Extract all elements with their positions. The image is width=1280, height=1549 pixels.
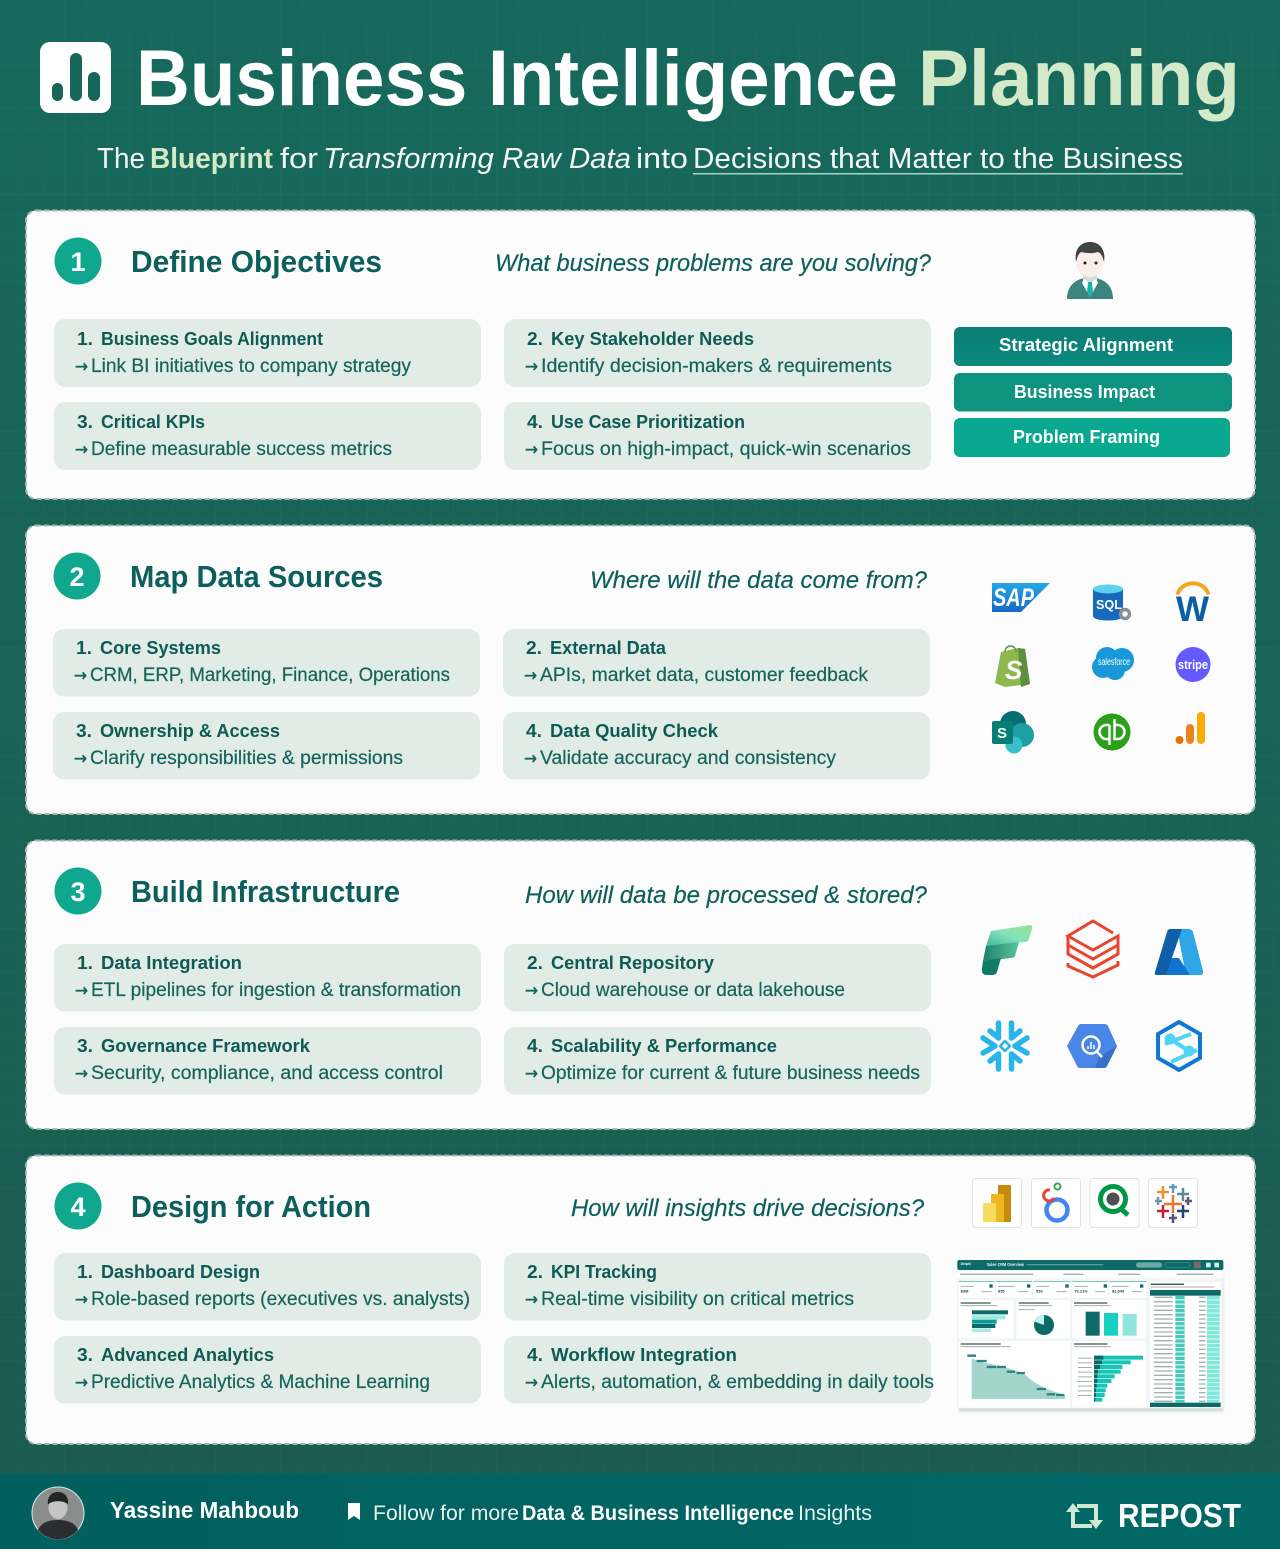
card: kpi tracking: 2. [527, 1261, 543, 1282]
footer bar [0, 1474, 1280, 1549]
card: data quality check: Validate accuracy and consistency [540, 748, 837, 769]
card: external data: External Data [550, 637, 667, 658]
card: data quality check [503, 712, 930, 780]
card: critical kpis: Define measurable success metrics [91, 439, 392, 460]
title: Planning [918, 33, 1240, 122]
icon: Looker tile [1032, 1178, 1080, 1228]
panel: define objectives [26, 210, 1255, 499]
card: critical kpis: → [75, 440, 88, 460]
step badge 3: 3 [70, 877, 86, 907]
subtitle: The [97, 143, 145, 175]
icon: SharePoint [992, 711, 1034, 754]
repost label: REPOST [1118, 1497, 1241, 1534]
card: central repository: Cloud warehouse or data lakehouse [541, 980, 845, 1001]
author name: Yassine Mahboub [110, 1497, 299, 1523]
card: external data [503, 629, 930, 696]
subtitle: Decisions that Matter to the Business [693, 143, 1183, 175]
card: advanced analytics: Advanced Analytics [101, 1344, 274, 1365]
card: kpi tracking: KPI Tracking [551, 1261, 657, 1282]
chart: column by region [1072, 1300, 1146, 1338]
card: ownership and access [53, 712, 480, 780]
card: use case prioritization [504, 402, 931, 470]
kpi cards: $3M [961, 1289, 969, 1294]
icon: business person [1067, 242, 1113, 299]
card: ownership and access: 3. [76, 720, 92, 741]
table: sales agent performance [1150, 1282, 1221, 1408]
card: dashboard design: Dashboard Design [101, 1261, 260, 1282]
icon: Tableau tile [1148, 1178, 1198, 1228]
follow text [373, 1502, 872, 1525]
kpi cards: 533 [1036, 1289, 1043, 1294]
card: data quality check: 4. [526, 720, 542, 741]
icon: repost arrows [1066, 1503, 1103, 1529]
pill: strategic alignment: Strategic Alignment [999, 334, 1173, 355]
step badge 1: 1 [70, 247, 86, 277]
card: workflow integration [504, 1336, 934, 1404]
dashboard header: Delphi [961, 1262, 971, 1266]
card: data quality check: Data Quality Check [550, 720, 719, 741]
card: critical kpis: 3. [77, 411, 93, 432]
step badge 2 [54, 552, 100, 600]
card: use case prioritization: → [525, 440, 538, 460]
icon: Microsoft Fabric [982, 925, 1032, 975]
kpi cards: $2,649 [1112, 1289, 1125, 1294]
card: business goals alignment: 1. [77, 328, 93, 349]
card: central repository: → [525, 981, 538, 1001]
card: governance framework [54, 1027, 481, 1094]
subtitle: for [280, 143, 318, 175]
panel: map data sources [26, 526, 1255, 814]
card: data integration: 1. [77, 952, 93, 973]
card: scalability and performance [504, 1027, 931, 1094]
subtitle [97, 143, 1183, 175]
card: use case prioritization: Focus on high-impact, quick-win scenarios [541, 439, 911, 460]
icon: Workday: W [1176, 590, 1209, 629]
card: kpi tracking: → [525, 1290, 538, 1310]
icon: Stripe: stripe [1178, 657, 1208, 672]
follow text: Data & Business Intelligence [522, 1502, 794, 1525]
heading: Map Data Sources [130, 559, 383, 594]
icon: Qlik tile [1090, 1178, 1139, 1228]
card: scalability and performance: Optimize for current & future business needs [541, 1063, 920, 1084]
card: advanced analytics: 3. [77, 1344, 93, 1365]
card: key stakeholder needs [504, 319, 931, 387]
card: workflow integration: → [525, 1373, 538, 1393]
card: core systems: CRM, ERP, Marketing, Finance, Operations [90, 665, 450, 686]
icon: Synapse [1158, 1022, 1200, 1070]
card: external data: → [524, 666, 537, 686]
card: data integration: Data Integration [101, 952, 242, 973]
card: ownership and access: Ownership & Access [100, 720, 280, 741]
subtitle: Transforming Raw Data [323, 143, 631, 175]
subtitle: into [636, 143, 688, 175]
icon: QuickBooks [1094, 714, 1130, 750]
card: use case prioritization: Use Case Prioritization [551, 411, 745, 432]
chart: revenue area [959, 1341, 1070, 1408]
card: workflow integration: Alerts, automation, & embedding in daily tools [541, 1372, 934, 1393]
step badge 3 [54, 868, 102, 914]
card: workflow integration: 4. [527, 1344, 543, 1365]
question: What business problems are you solving? [495, 250, 932, 277]
card: use case prioritization: 4. [527, 411, 543, 432]
card: key stakeholder needs: 2. [527, 328, 543, 349]
logo: bar chart icon [40, 42, 111, 113]
icon: Google Analytics [1176, 712, 1205, 744]
card: governance framework: 3. [77, 1035, 93, 1056]
panel: build infrastructure [26, 840, 1255, 1129]
card: core systems [53, 629, 480, 696]
icon: bookmark [348, 1503, 360, 1520]
dashboard screenshot [957, 1260, 1223, 1412]
icon: Snowflake [983, 1023, 1027, 1069]
icon: Salesforce: salesforce [1098, 657, 1130, 668]
icon: SQL database: SQL [1096, 597, 1122, 612]
pill: business impact [954, 373, 1232, 412]
card: business goals alignment: Business Goals Alignment [101, 328, 323, 349]
question: Where will the data come from? [590, 567, 928, 594]
subtitle: Blueprint [150, 143, 273, 175]
card: data integration [54, 944, 481, 1012]
pill: strategic alignment [954, 327, 1232, 366]
follow text: Insights [798, 1502, 872, 1525]
card: governance framework: Governance Framework [101, 1035, 311, 1056]
card: critical kpis: Critical KPIs [101, 411, 205, 432]
card: central repository: Central Repository [551, 952, 715, 973]
card: central repository [504, 944, 931, 1012]
card: key stakeholder needs: → [525, 357, 538, 377]
pill: problem framing: Problem Framing [1013, 426, 1160, 447]
pill: problem framing [954, 418, 1230, 457]
icon: Databricks [1068, 921, 1118, 977]
card: data integration: ETL pipelines for ingestion & transformation [91, 980, 461, 1001]
card: core systems: 1. [76, 637, 92, 658]
icon: BigQuery [1067, 1024, 1117, 1068]
card: advanced analytics: → [75, 1373, 88, 1393]
card: scalability and performance: 4. [527, 1035, 543, 1056]
avatar [32, 1487, 84, 1539]
question: How will insights drive decisions? [571, 1195, 925, 1222]
step badge 4: 4 [70, 1192, 86, 1222]
icon: Azure [1155, 929, 1203, 975]
icon: SAP: SAP [993, 584, 1034, 612]
card: core systems: Core Systems [100, 637, 221, 658]
icon: Stripe [1176, 647, 1210, 682]
title: Business Intelligence [136, 33, 898, 122]
card: dashboard design: 1. [77, 1261, 93, 1282]
card: central repository: 2. [527, 952, 543, 973]
icon: SharePoint: S [997, 725, 1007, 742]
icon: Shopify: S [1005, 655, 1023, 685]
card: scalability and performance: Scalability & Performance [551, 1035, 777, 1056]
icon: Power BI tile [972, 1178, 1022, 1228]
card: core systems: → [74, 666, 87, 686]
card: dashboard design: Role-based reports (executives vs. analysts) [91, 1289, 470, 1310]
heading: Design for Action [131, 1189, 371, 1224]
card: ownership and access: Clarify responsibilities & permissions [90, 748, 403, 769]
card: ownership and access: → [74, 749, 87, 769]
dashboard header: Sales CRM Overview [987, 1262, 1025, 1267]
card: data integration: → [75, 981, 88, 1001]
kpi cards: 79.21% [1074, 1289, 1088, 1294]
step badge 1 [54, 238, 102, 284]
card: kpi tracking: Real-time visibility on critical metrics [541, 1289, 854, 1310]
step badge 4 [54, 1182, 102, 1230]
card: dashboard design [54, 1253, 481, 1320]
card: advanced analytics: Predictive Analytics & Machine Learning [91, 1372, 430, 1393]
panel: design for action [26, 1156, 1255, 1444]
kpi cards [959, 1281, 1147, 1298]
heading: Build Infrastructure [131, 874, 400, 909]
card: external data: 2. [526, 637, 542, 658]
card: critical kpis [54, 402, 481, 470]
icon: Shopify [995, 646, 1030, 687]
dashboard header [957, 1260, 1223, 1270]
card: kpi tracking [504, 1253, 931, 1320]
question: How will data be processed & stored? [525, 882, 928, 909]
heading: Define Objectives [131, 244, 382, 279]
card: business goals alignment: Link BI initiatives to company strategy [91, 356, 411, 377]
card: governance framework: Security, compliance, and access control [91, 1063, 443, 1084]
chart: top products [959, 1300, 1014, 1338]
card: workflow integration: Workflow Integration [551, 1344, 737, 1365]
step badge 2: 2 [69, 562, 85, 592]
card: dashboard design: → [75, 1290, 88, 1310]
pill: business impact: Business Impact [1014, 381, 1155, 402]
card: key stakeholder needs: Key Stakeholder Needs [551, 328, 754, 349]
chart: opportunities by sector [1072, 1341, 1146, 1408]
card: external data: APIs, market data, customer feedback [540, 665, 869, 686]
icon: SQL database [1093, 584, 1130, 620]
card: key stakeholder needs: Identify decision-makers & requirements [541, 356, 892, 377]
chart: opportunity pie [1017, 1300, 1070, 1338]
icon: Salesforce [1092, 647, 1134, 680]
kpi cards: 635 [998, 1289, 1005, 1294]
card: scalability and performance: → [525, 1064, 538, 1084]
card: governance framework: → [75, 1064, 88, 1084]
card: advanced analytics [54, 1336, 481, 1404]
card: business goals alignment: → [75, 357, 88, 377]
card: data quality check: → [524, 749, 537, 769]
follow text: Follow for more [373, 1502, 519, 1525]
card: business goals alignment [54, 319, 481, 387]
